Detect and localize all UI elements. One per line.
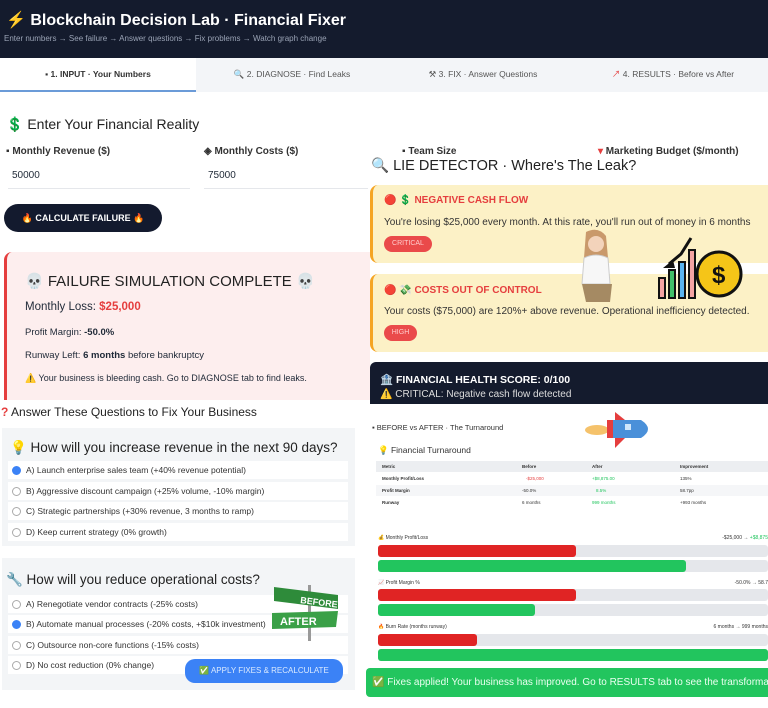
- table: financial turnaround: 58.7pp: [680, 488, 694, 493]
- table: financial turnaround: 999 months: [592, 500, 616, 505]
- panel: health score: [370, 362, 768, 404]
- panel: question 2: C) Outsource non-core functions (-15% costs): [26, 640, 199, 650]
- failure title: 💀 FAILURE SIMULATION COMPLETE 💀: [25, 273, 315, 290]
- icon: before after sign: BEFORE: [300, 595, 338, 610]
- card: negative cash flow: CRITICAL: [392, 240, 424, 247]
- table: financial turnaround: +$8,875.00: [592, 476, 615, 481]
- tab 4: ↗ 4. RESULTS · Before vs After: [612, 69, 734, 79]
- chart: monthly profit/loss bars: -$25,000 → +$8,875: [722, 535, 768, 541]
- panel: question 1: C) Strategic partnerships (+30% revenue, 3 months to ramp): [26, 506, 254, 516]
- panel: question 1: A) Launch enterprise sales team (+40% revenue potential): [26, 465, 246, 475]
- title: ⚡ Blockchain Decision Lab · Financial Fixer: [6, 12, 346, 29]
- table: financial turnaround: -$25,000: [526, 476, 544, 481]
- card: negative cash flow: 🔴 💲 NEGATIVE CASH FLOW: [384, 195, 528, 206]
- label marketing: ▾ Marketing Budget ($/month): [598, 146, 739, 157]
- header: [0, 0, 768, 58]
- panel: question 1: B) Aggressive discount campaign (+25% volume, -10% margin): [26, 486, 264, 496]
- table: financial turnaround: Monthly Profit/Loss: [382, 476, 424, 481]
- tab bar: [0, 58, 768, 92]
- tab 2: 🔍 2. DIAGNOSE · Find Leaks: [234, 69, 350, 79]
- chart: profit margin bars: [378, 580, 768, 616]
- panel: question 1: [2, 428, 355, 546]
- label team size: ▪ Team Size: [402, 146, 456, 157]
- card: negative cash flow: You're losing $25,000 every month. At this rate, you'll run out of money in 6 months: [384, 217, 750, 228]
- panel: question 1: D) Keep current strategy (0% growth): [26, 527, 167, 537]
- table: financial turnaround: 6 months: [522, 500, 541, 505]
- table: financial turnaround: 8.5%: [596, 488, 606, 493]
- input revenue: [8, 162, 190, 189]
- chart: burn rate bars: 6 months → 999 months: [714, 624, 768, 630]
- table: financial turnaround: +993 months: [680, 500, 706, 505]
- panel: question 2: [2, 558, 355, 690]
- button calculate: [4, 204, 162, 232]
- label revenue: ▪ Monthly Revenue ($): [6, 146, 110, 157]
- card: costs out of control: HIGH: [392, 329, 409, 336]
- tab 1 active: ▪ 1. INPUT · Your Numbers: [45, 69, 151, 79]
- table: financial turnaround: 💡 Financial Turnaround: [378, 445, 471, 455]
- button calculate: 🔥 CALCULATE FAILURE 🔥: [22, 213, 144, 223]
- tab 3: ⚒ 3. FIX · Answer Questions: [429, 69, 537, 79]
- table: financial turnaround: Profit Margin: [382, 488, 410, 493]
- chart: burn rate bars: 🔥 Burn Rate (months runway): [378, 624, 447, 630]
- icon: before after sign: [272, 585, 338, 641]
- icon: declining chart with coin: [658, 237, 742, 299]
- icon: declining chart with coin: $: [712, 262, 726, 289]
- table: financial turnaround: After: [592, 464, 603, 469]
- icon: before after sign: AFTER: [280, 616, 317, 628]
- icon: rocket: [585, 412, 648, 448]
- table: financial turnaround: [376, 445, 768, 505]
- heading: answer questions: ? Answer These Questions to Fix Your Business: [1, 405, 257, 419]
- heading: lie detector: 🔍 LIE DETECTOR · Where's The Leak?: [371, 158, 636, 174]
- chart: profit margin bars: 📈 Profit Margin %: [378, 580, 420, 586]
- profit margin: Profit Margin: -50.0%: [25, 327, 114, 338]
- chart: burn rate bars: [378, 624, 768, 661]
- button: apply fixes: ✅ APPLY FIXES & RECALCULATE: [199, 666, 329, 675]
- icon: stressed woman: [582, 230, 612, 302]
- tab 1 active: [0, 58, 196, 92]
- card: costs out of control: Your costs ($75,000) are 120%+ above revenue. Operational inefficiency detected.: [384, 306, 750, 317]
- chart: monthly profit/loss bars: [378, 534, 768, 572]
- card: costs out of control: [370, 274, 768, 352]
- panel: question 2: B) Automate manual processes (-20% costs, +$10k investment): [26, 619, 266, 629]
- panel: health score: 🏦 FINANCIAL HEALTH SCORE: 0/100: [380, 374, 570, 386]
- banner: fixes applied: [366, 668, 768, 697]
- table: financial turnaround: Runway: [382, 500, 399, 505]
- card: negative cash flow: [370, 185, 768, 263]
- panel: health score: ⚠️ CRITICAL: Negative cash flow detected: [380, 389, 571, 400]
- runway: Runway Left: 6 months before bankruptcy: [25, 350, 204, 361]
- results heading: ▪ BEFORE vs AFTER · The Turnaround: [372, 423, 503, 432]
- section heading: enter reality: 💲 Enter Your Financial Reality: [6, 116, 199, 132]
- panel: failure simulation: [4, 252, 370, 400]
- table: financial turnaround: 135%: [680, 476, 692, 481]
- chart: monthly profit/loss bars: 💰 Monthly Profit/Loss: [378, 535, 428, 541]
- table: financial turnaround: Before: [522, 464, 536, 469]
- warning: ⚠️ Your business is bleeding cash. Go to DIAGNOSE tab to find leaks.: [25, 373, 307, 383]
- input revenue: 50000: [12, 170, 40, 181]
- button: apply fixes: [185, 659, 343, 683]
- table: financial turnaround: -50.0%: [522, 488, 536, 493]
- chart: profit margin bars: -50.0% → 58.7: [735, 580, 768, 586]
- table: financial turnaround: Metric: [382, 464, 395, 469]
- q2 title: 🔧 How will you reduce operational costs?: [6, 572, 260, 587]
- label costs: ◈ Monthly Costs ($): [204, 146, 298, 157]
- table: financial turnaround: Improvement: [680, 464, 708, 469]
- input costs: 75000: [208, 170, 236, 181]
- q1 title: 💡 How will you increase revenue in the next 90 days?: [10, 440, 337, 455]
- panel: question 2: D) No cost reduction (0% change): [26, 660, 154, 670]
- card: costs out of control: 🔴 💸 COSTS OUT OF CONTROL: [384, 285, 542, 296]
- panel: question 2: A) Renegotiate vendor contracts (-25% costs): [26, 599, 198, 609]
- subtitle: Enter numbers → See failure → Answer questions → Fix problems → Watch graph change: [4, 34, 327, 43]
- monthly loss: Monthly Loss: $25,000: [25, 301, 141, 313]
- input costs: [204, 162, 368, 189]
